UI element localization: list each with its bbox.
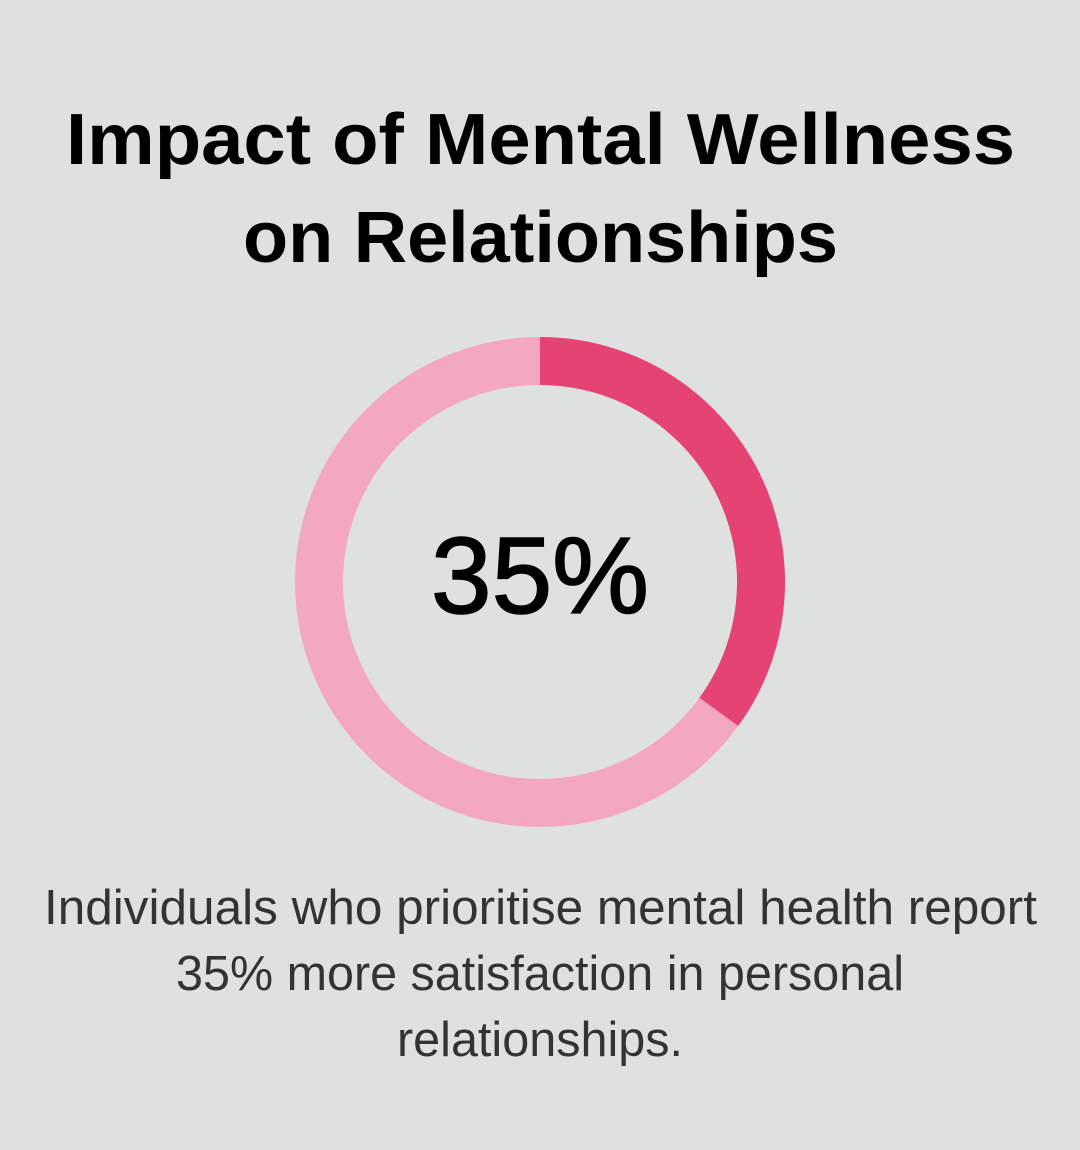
description text: Individuals who prioritise mental health report — [44, 881, 1037, 935]
donut segment: highlighted 35% — [540, 337, 785, 726]
description text — [44, 881, 1037, 1067]
title: Impact of Mental Wellness — [66, 100, 1015, 180]
description text: relationships. — [397, 1013, 683, 1067]
donut chart: 35% — [319, 337, 785, 803]
title — [66, 100, 1015, 278]
description text: 35% more satisfaction in personal — [176, 947, 904, 1001]
donut value: 35% — [431, 515, 649, 637]
title: on Relationships — [243, 198, 838, 278]
donut track: remaining 65% — [319, 361, 761, 803]
